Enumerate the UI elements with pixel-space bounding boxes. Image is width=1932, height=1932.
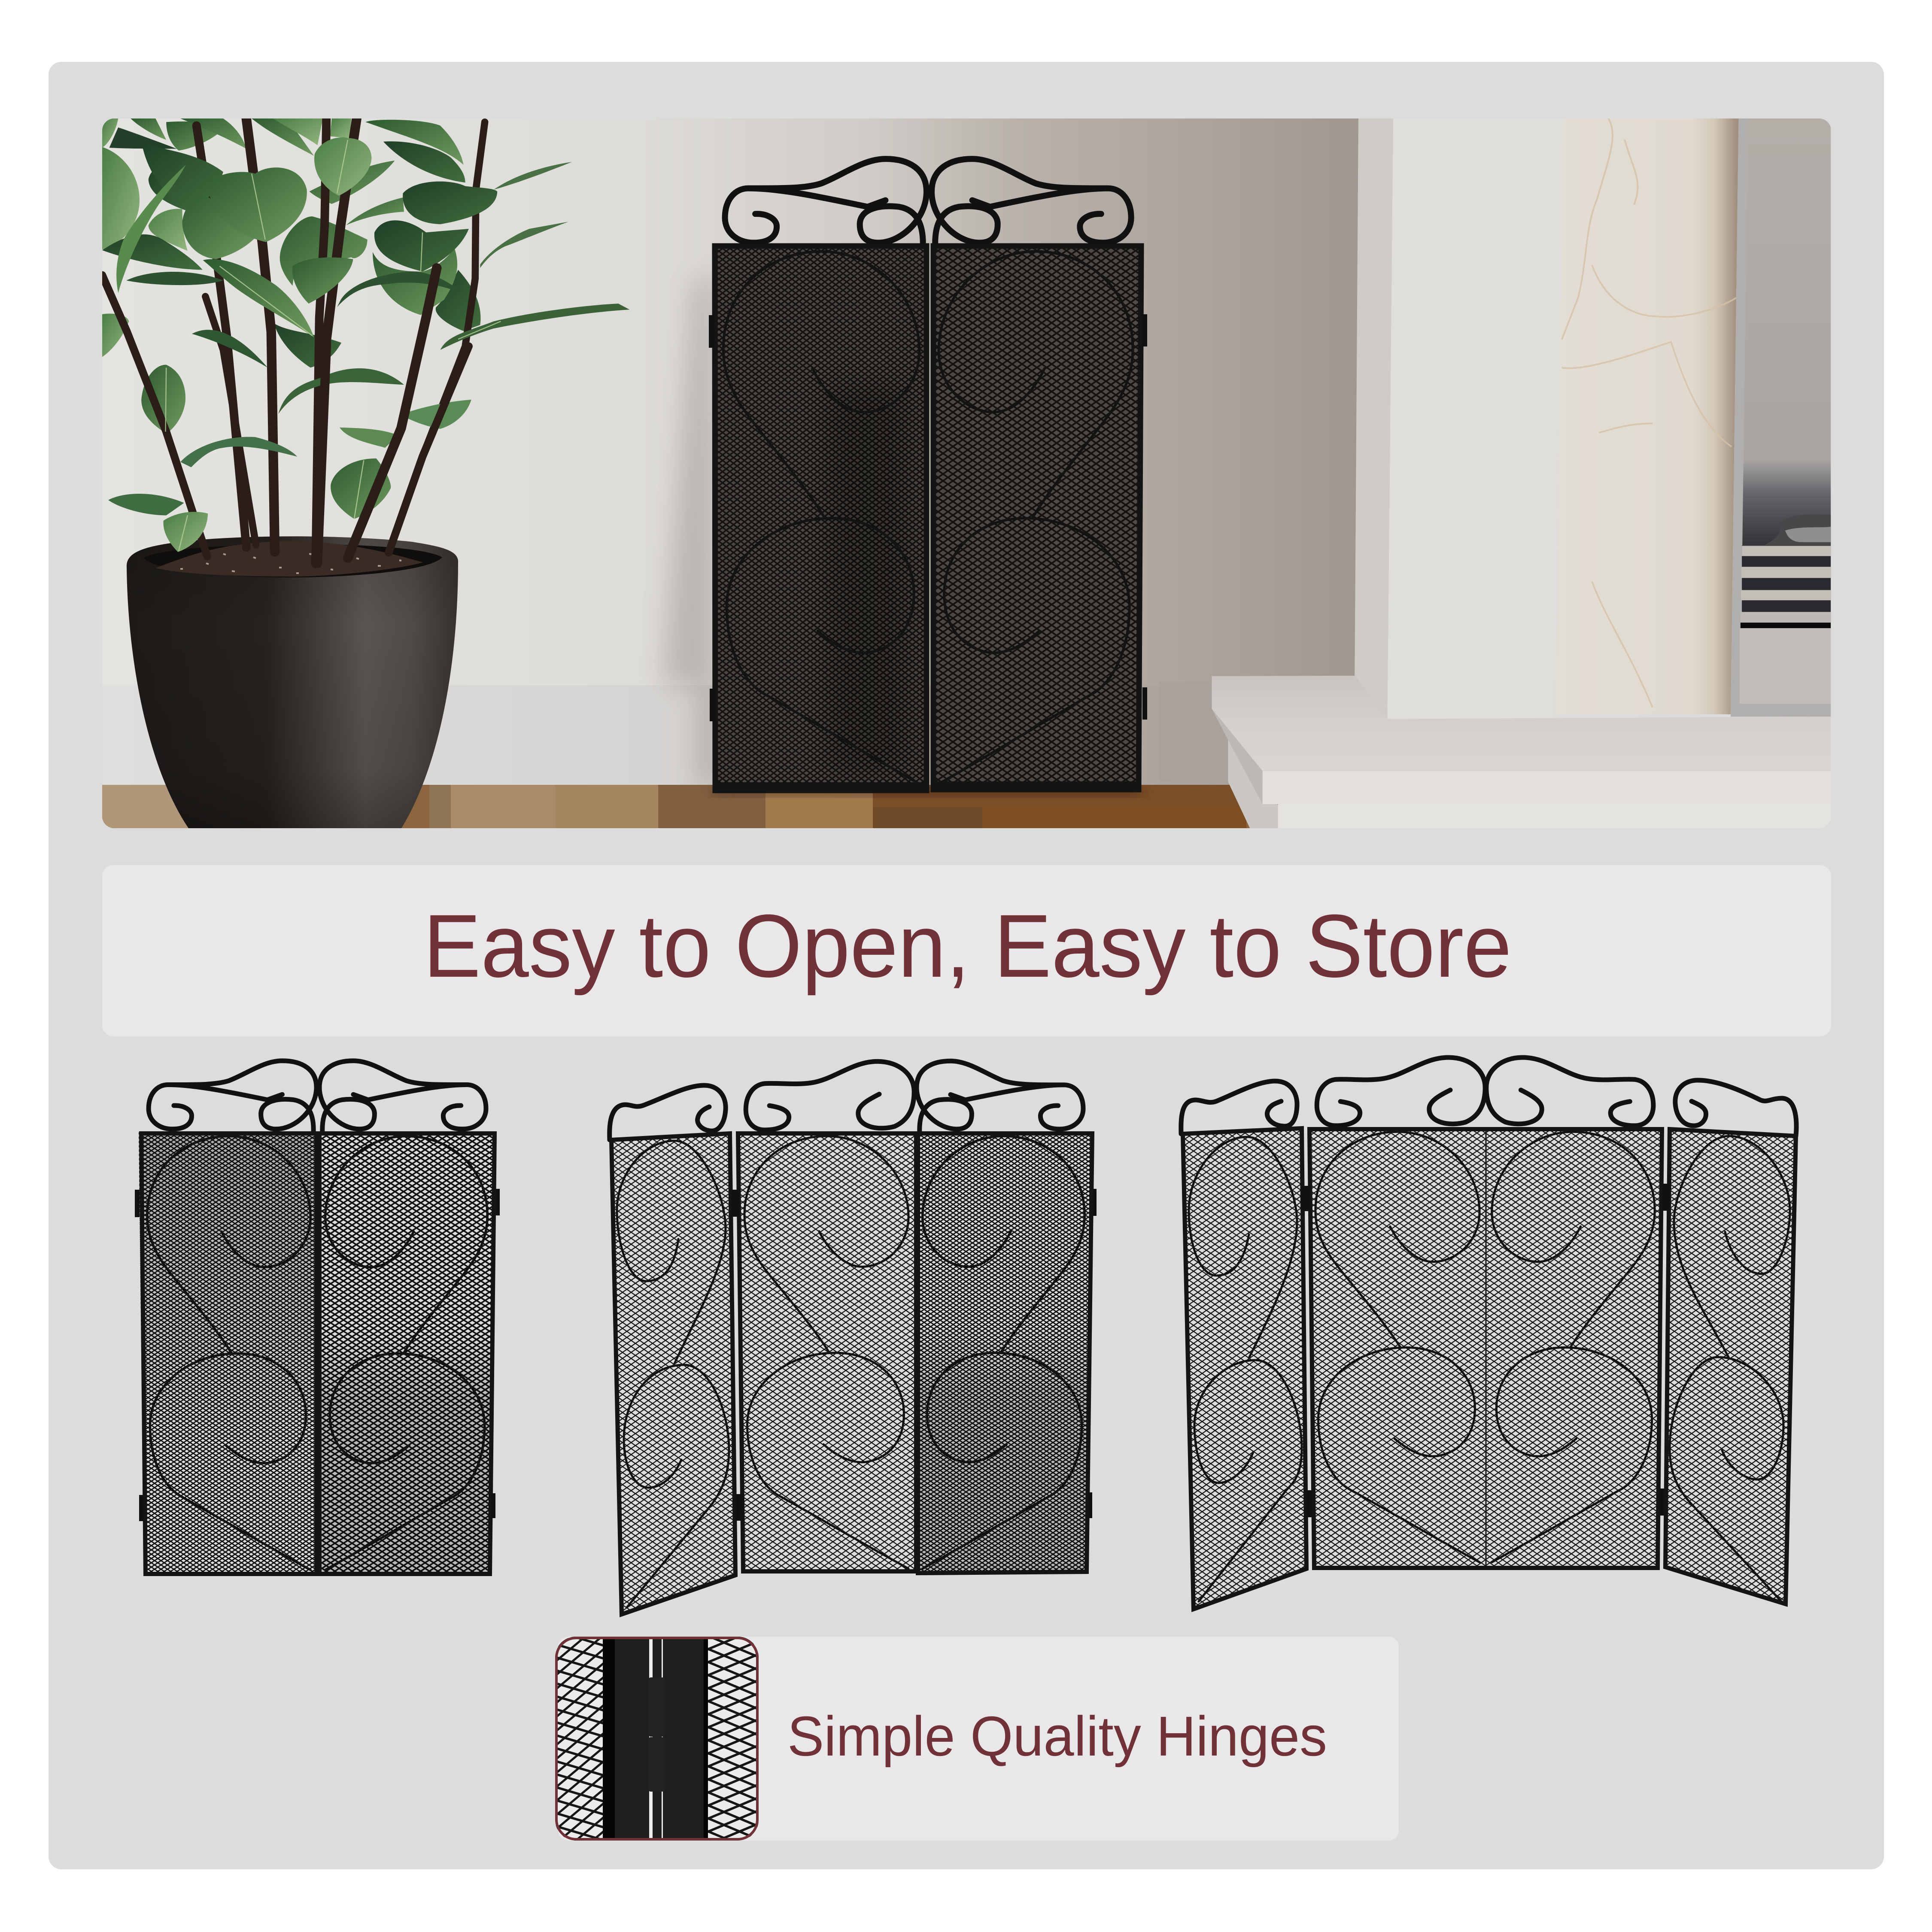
hinge detail image (555, 1637, 759, 1841)
front leaves (102, 118, 630, 519)
baseboard end (1159, 682, 1229, 782)
marble surround (1556, 118, 1739, 714)
right panel (916, 1061, 1093, 1574)
photo screen hinges (709, 314, 1147, 721)
hinge callout (555, 1637, 1399, 1841)
left panel (139, 1061, 316, 1575)
rubber plant (102, 118, 630, 563)
hearth (1212, 676, 1831, 828)
left wing (1181, 1081, 1307, 1610)
stems (197, 118, 485, 563)
closed two-panel screen (135, 1061, 500, 1575)
left door (715, 159, 927, 791)
back leaves (109, 118, 572, 368)
chimney breast side (1355, 118, 1393, 719)
hinges (732, 1189, 1097, 1521)
leaf midribs (166, 140, 501, 551)
callout text: Simple Quality Hinges (787, 1704, 1327, 1768)
right wing (1665, 1080, 1797, 1605)
title: Easy to Open, Easy to Store (423, 896, 1512, 996)
foreground stems (102, 268, 469, 563)
right door (932, 159, 1141, 790)
hinges (135, 1189, 500, 1521)
baseboard (701, 685, 931, 785)
screen cast shadow (663, 275, 717, 786)
center panel (1307, 1057, 1663, 1569)
folded wing (610, 1085, 736, 1615)
title banner (102, 865, 1831, 1036)
hinges (1302, 1184, 1670, 1517)
fireplace (1159, 118, 1831, 828)
callout bar (558, 1637, 1399, 1841)
firebox interior (1742, 118, 1831, 545)
lifestyle photo: screen by fireplace (102, 118, 1831, 828)
steel fireplace frame (1731, 118, 1831, 717)
center panel (737, 1061, 916, 1573)
wall (690, 118, 1390, 785)
mantel pillar front (1387, 118, 1563, 719)
fully open three-part screen (1181, 1057, 1797, 1610)
firebox grate bars (1740, 545, 1831, 704)
photo fire screen (709, 159, 1147, 791)
nearest leaf (163, 512, 208, 552)
half-open three-part screen (610, 1061, 1097, 1615)
plant pot (127, 536, 458, 828)
right panel (319, 1061, 496, 1575)
coals (1764, 514, 1831, 545)
wood floor (102, 785, 1304, 828)
